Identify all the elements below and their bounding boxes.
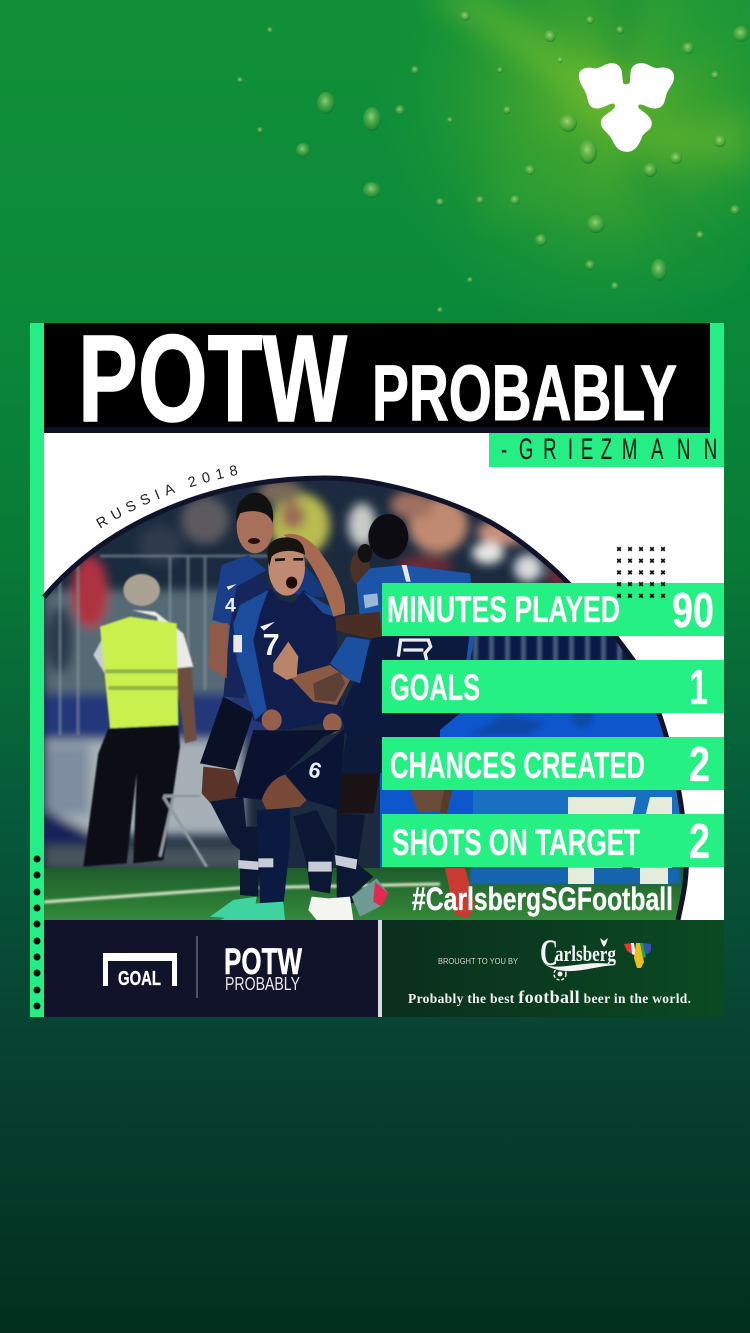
icon: Goal logo frame (103, 953, 177, 986)
curved caption: Russia 2018: RUSSIA 2018 (96, 465, 238, 528)
icon: small football (554, 968, 566, 980)
photo: Griezmann: 7 (263, 628, 280, 662)
right green strip (710, 323, 724, 433)
icon: multicolour trefoil (624, 943, 651, 968)
photo: third player in blue behind (335, 514, 475, 916)
photo: player Varane (200, 493, 323, 920)
stat: minutes played: MINUTES PLAYED (387, 589, 620, 630)
background: light glow with water droplets (237, 0, 750, 345)
decorative x grid (614, 543, 668, 602)
footer POTW: POTW (224, 941, 302, 982)
photo: grass pitch (44, 868, 684, 920)
logo: white trefoil (580, 64, 673, 151)
footer left: Goal and POTW branding (44, 920, 378, 1017)
stat: chances created: CHANCES CREATED (390, 745, 645, 786)
divider (196, 936, 198, 998)
hashtag: #CarlsbergSGFootball (412, 881, 673, 917)
brought to you by: BROUGHT TO YOU BY (438, 956, 518, 966)
Carlsberg wordmark: arlsberg (555, 941, 616, 966)
player name tag: -GRIEZMANN (501, 433, 717, 466)
footer PROBABLY: PROBABLY (225, 973, 300, 994)
stat: chances created: 2 (689, 738, 710, 792)
slogan: Probably the best football beer in the world. (408, 987, 691, 1007)
photo: player with number 9 shorts (220, 728, 353, 920)
Carlsberg wordmark: C (540, 933, 558, 974)
stat: goals: 1 (689, 661, 708, 715)
photo: player Varane: 4 (225, 596, 236, 617)
left green strip (30, 323, 44, 1017)
photo: steward in yellow vest (83, 574, 207, 867)
photo: France players celebrating (44, 470, 694, 920)
Carlsberg wordmark (540, 933, 616, 974)
photo: player with number 9 shorts: 9 (306, 756, 324, 784)
photo: far leg and red boot (410, 790, 475, 918)
footer separator (378, 920, 382, 1017)
stat: goals: GOALS (390, 667, 480, 708)
stat: shots on target (382, 814, 724, 869)
stat: minutes played: 90 (672, 584, 714, 638)
title: POTW: POTW (78, 311, 347, 448)
stat: chances created (382, 737, 724, 792)
photo: blurred stadium background (44, 480, 574, 870)
footer right: Carlsberg sponsor (382, 920, 724, 1017)
arc outline of photo (44, 478, 686, 920)
Goal wordmark: GOAL (118, 968, 161, 990)
stat: goals (382, 660, 724, 715)
panel: white card (44, 433, 724, 920)
traced figures in reference zoom coordinates (83, 493, 477, 920)
photo: navy fence on right (470, 636, 630, 660)
photo: fence rails (60, 556, 270, 735)
stat: shots on target: 2 (689, 815, 710, 869)
photo: blue advertising boards (380, 713, 684, 868)
photo: Griezmann (233, 534, 370, 800)
stat: shots on target: SHOTS ON TARGET (392, 822, 640, 863)
stat rows (382, 583, 724, 869)
left strip dots (34, 856, 40, 1010)
title band (44, 311, 710, 448)
